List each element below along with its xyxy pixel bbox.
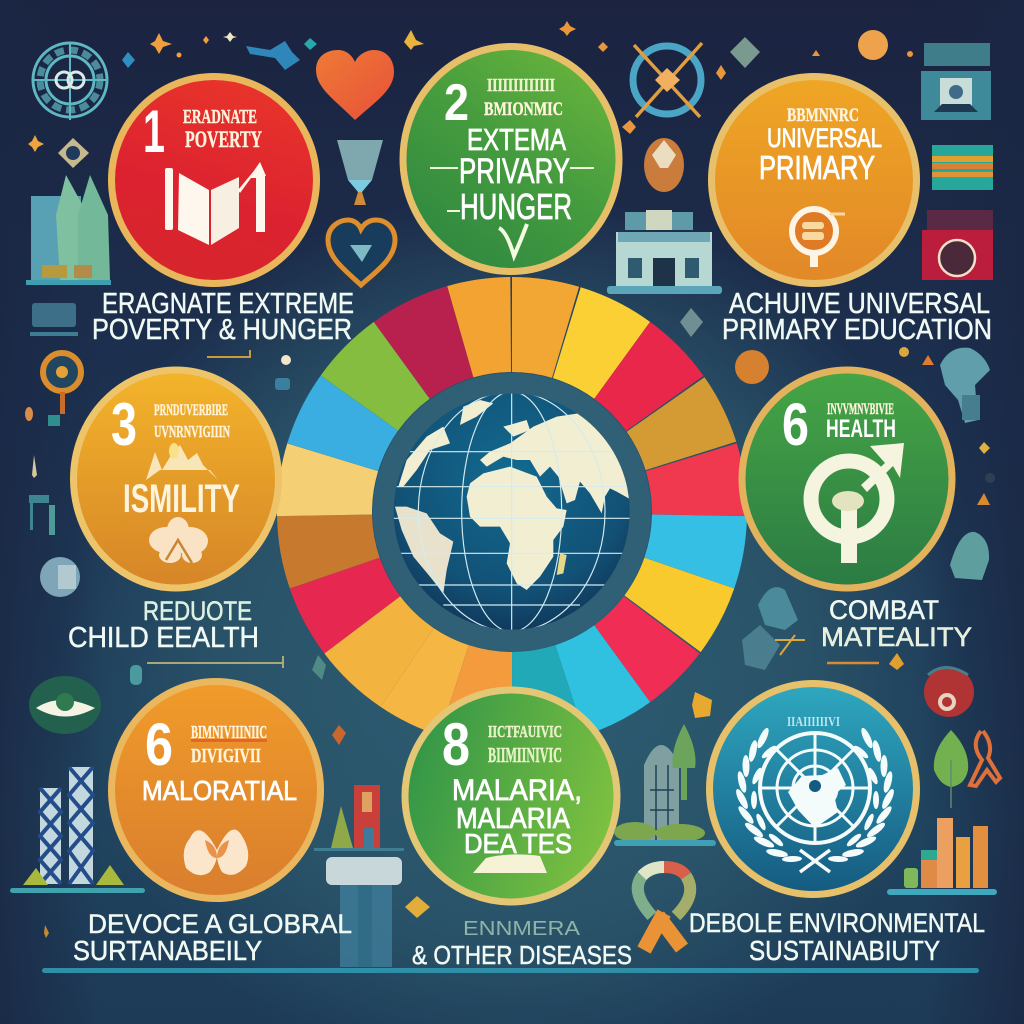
icon: orange medallion	[644, 138, 684, 192]
goal small heading: INVVMNVBIVIE	[827, 401, 894, 418]
goal small heading	[826, 401, 896, 443]
icon: grey diamond	[730, 37, 760, 68]
goal 8 small heading	[488, 722, 562, 767]
icon: school building	[607, 210, 722, 294]
small heading: IIAIIIIIIVI	[787, 715, 840, 730]
goal 8 small heading: BIIMIINIVIC	[488, 743, 562, 767]
icon: star and badge	[28, 135, 89, 168]
arrow line above lower left circle	[147, 656, 283, 668]
label: achieve universal primary education: ACHUIVE UNIVERSAL	[729, 288, 990, 320]
panel: goal 6 orange circle	[112, 682, 320, 898]
goal 1 small heading: POVERTY	[185, 127, 262, 152]
icon: text panel with shield top right	[921, 43, 991, 120]
goal 2 main text: HUNGER	[460, 186, 572, 227]
label: eradicate extreme poverty and hunger	[92, 288, 354, 346]
icon: scattered items bottom	[44, 655, 346, 938]
goal 2 small heading: IIIIIIIIIIIII	[487, 75, 555, 95]
icon: green and grey shield right	[950, 532, 989, 580]
panel: goal 2 green circle	[403, 46, 619, 272]
icon: scanner device	[30, 303, 78, 336]
goal 3 small heading: UVNRNVIGIIIN	[154, 422, 230, 441]
goal 8 main text: MALARIA,	[452, 774, 582, 807]
icon: machine column	[326, 857, 402, 967]
icon: blue face mask right	[940, 348, 990, 423]
goal number 2: 2	[444, 74, 469, 132]
icon: red panel	[922, 210, 993, 280]
bar chart	[887, 818, 997, 895]
icon: small stars top center right	[559, 21, 913, 134]
label: reduce child health	[68, 596, 259, 654]
icon: lower right figures	[742, 587, 805, 670]
goal 3 main text with candles: ISMILITY	[123, 477, 240, 521]
goal number 6: 6	[782, 391, 809, 458]
goal number 8: 8	[442, 711, 470, 778]
icon: multicolor ribbon	[638, 867, 690, 950]
icon: orange flower	[184, 830, 248, 875]
panel: goal 1 red circle	[112, 76, 316, 284]
goal 3 small heading	[154, 402, 230, 441]
label: debole environmental sustainability: SUSTAINABIUTY	[749, 935, 940, 966]
goal 2 small heading: BMIONMIC	[484, 99, 563, 120]
icon: scattered items right	[899, 347, 995, 505]
icon: green eye left	[29, 676, 101, 734]
panel: goal health green circle	[742, 370, 952, 588]
icon: lattice towers	[10, 767, 145, 893]
goal small heading: HEALTH	[826, 415, 896, 443]
label: eradicate extreme poverty and hunger: ERAGNATE EXTREME	[102, 288, 354, 320]
goal 8 small heading: IICTFAUIVIC	[488, 722, 562, 741]
icon: flower	[149, 517, 208, 563]
goal 2 small heading	[484, 75, 563, 120]
icon: red padlock	[924, 667, 974, 717]
panel: goal 3 yellow-orange circle	[74, 370, 278, 588]
icon: orange ribbon	[970, 731, 1000, 786]
label: enhance and other diseases: ENNMERA	[463, 918, 581, 940]
goal 8 main text	[452, 774, 582, 859]
icon: gold star bottom	[405, 896, 430, 918]
icon: sun	[858, 30, 888, 60]
icon: sparkles top left	[122, 30, 424, 68]
goal number 6: 6	[145, 711, 173, 778]
goal 2 main text: EXTEMA	[467, 122, 566, 157]
goal 6 small heading	[191, 722, 267, 767]
icon: red cabinet and tent	[314, 785, 404, 851]
globe	[373, 373, 651, 651]
label: develop a global sustainability	[73, 909, 352, 966]
icon: arch window and tree	[614, 724, 716, 846]
icon: grey diamond right	[680, 308, 703, 337]
icon: orange ring left	[43, 353, 81, 414]
goal number 3: 3	[111, 391, 137, 458]
label: reduce child health: CHILD EEALTH	[68, 622, 259, 654]
goal 1 small heading	[183, 106, 262, 152]
panel: goal 8 green circle	[405, 690, 617, 902]
icon: goblet	[337, 140, 383, 205]
goal 3 main text with candles	[123, 443, 240, 521]
goal 2 main text	[430, 122, 594, 227]
icon: check mark	[499, 224, 527, 256]
icon: gender symbol	[811, 443, 904, 563]
goal 6 small heading: DIVIGIVII	[191, 745, 261, 767]
goal 8 main text: DEA TES	[464, 828, 572, 859]
panel: goal universal primary orange circle	[712, 76, 916, 284]
goal 2 main text: PRIVARY	[459, 152, 570, 191]
goal 1 small heading: ERADNATE	[183, 106, 257, 128]
label: combat mortality: MATEALITY	[821, 622, 972, 652]
icon: heart ring with funnel	[328, 220, 395, 285]
icon: orange fruit right	[735, 350, 769, 384]
icon: grey medical badge left	[40, 557, 80, 597]
icon: colored stripes	[932, 145, 993, 190]
goal 3 small heading: PRNDUVERBIRE	[154, 402, 228, 419]
goal 6 main text: MALORATIAL	[142, 775, 297, 806]
main text: UNIVERSAL	[767, 123, 882, 153]
icon: crossed ring top center	[633, 43, 702, 117]
icon: blue bird	[246, 41, 300, 70]
label: achieve universal primary education: PRIMARY EDUCATION	[722, 314, 992, 346]
arrow line above UN circle	[827, 653, 904, 670]
goal 8 main text: MALARIA	[456, 803, 571, 835]
label: combat mortality	[821, 595, 972, 652]
panel: UN emblem blue circle	[710, 684, 916, 894]
label: reduce child health: REDUOTE	[143, 596, 252, 626]
label: develop a global sustainability: DEVOCE A GLOBRAL	[88, 909, 352, 939]
label: develop a global sustainability: SURTANABEILY	[73, 935, 262, 966]
icon: yellow nugget	[692, 692, 712, 718]
icon: UN globe emblem	[734, 727, 896, 872]
central goals wheel	[249, 249, 775, 775]
label: achieve universal primary education	[722, 288, 992, 346]
main text	[759, 123, 882, 186]
icon: book base	[473, 854, 547, 873]
icon: heart	[316, 50, 394, 120]
icon: education emblem	[792, 209, 845, 267]
small heading: BBMNNRC	[787, 105, 859, 126]
label: enhance and other diseases: & OTHER DISEASES	[412, 940, 632, 970]
label: eradicate extreme poverty and hunger: POVERTY & HUNGER	[92, 314, 352, 346]
main text: PRIMARY	[759, 149, 875, 186]
icon: green leaf	[934, 730, 968, 808]
icon: book and rising arrow	[165, 162, 266, 245]
goal number 1: 1	[143, 98, 165, 165]
label: combat mortality: COMBAT	[829, 595, 939, 625]
bottom baseline strip	[42, 968, 979, 973]
icon: building with trees	[26, 175, 111, 285]
icon: small scattered items left	[25, 350, 291, 535]
label: enhance and other diseases	[412, 918, 632, 970]
icon: compass wheel top left	[32, 42, 108, 120]
goal 6 small heading: BIMNIVIIINIIC	[191, 722, 267, 742]
label: debole environmental sustainability	[689, 908, 985, 966]
